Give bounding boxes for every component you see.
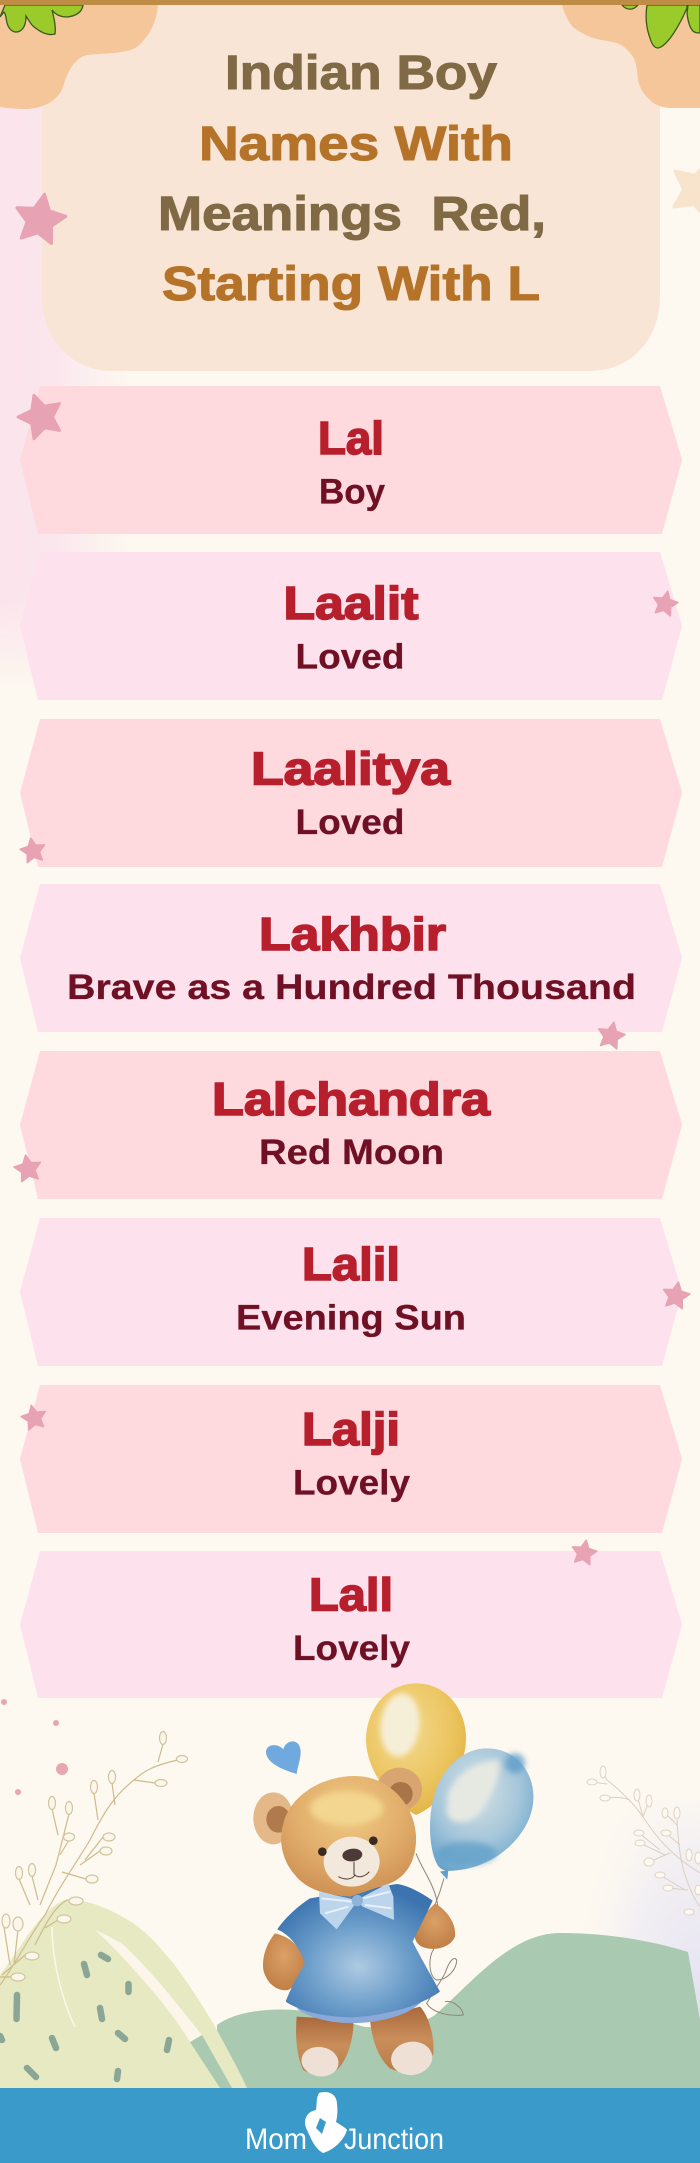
yellow balloon: [366, 1683, 466, 1815]
green hill: [217, 1933, 700, 2088]
meaning: Lovely: [293, 1464, 411, 1502]
top band: [0, 0, 700, 5]
banner: Laalitya: [20, 719, 682, 867]
star: beige: [664, 152, 700, 223]
banner: Lalil: [20, 1218, 682, 1366]
meaning: Evening Sun: [236, 1298, 466, 1338]
name: Lalil: [302, 1238, 400, 1290]
name: Lakhbir: [259, 908, 446, 960]
yellow hill: [0, 1899, 247, 2088]
name: Lall: [309, 1568, 393, 1620]
blue balloon: [430, 1748, 533, 1879]
footer band: [0, 2088, 700, 2163]
title: Meanings Red,: [158, 188, 546, 241]
banner: Lalji: [20, 1385, 682, 1533]
meaning: Loved: [296, 638, 404, 676]
left arm: [263, 1933, 305, 1990]
meaning: Lovely: [293, 1629, 411, 1668]
logo figure: [305, 2092, 347, 2153]
banner: Lalchandra: [20, 1051, 682, 1199]
dots: [1, 1699, 68, 1795]
title: Names With: [199, 118, 513, 171]
meaning: Loved: [296, 803, 404, 842]
meaning: Boy: [319, 472, 386, 512]
name: Laalit: [284, 577, 418, 629]
name: Lal: [318, 412, 384, 464]
eyes: [318, 1836, 378, 1856]
hem lace: [297, 2000, 422, 2023]
left branch: [0, 1732, 188, 1985]
mouth: [338, 1862, 369, 1879]
name: Laalitya: [251, 742, 450, 794]
meaning: Brave as a Hundred Thousand: [67, 968, 636, 1007]
bow tie: [319, 1883, 394, 1929]
right faded branch: [587, 1766, 700, 1915]
title: Starting With L: [162, 258, 540, 311]
right arm: [415, 1903, 455, 1949]
left ear: [253, 1792, 293, 1844]
name: Lalchandra: [212, 1073, 490, 1125]
corner blob: top left: [0, 5, 158, 109]
head: [281, 1776, 416, 1897]
dress: [277, 1884, 440, 2017]
leaf: top right: [622, 5, 700, 48]
legs: [296, 2007, 434, 2079]
balloon strings: [416, 1853, 463, 2015]
green wedge: [190, 2035, 232, 2088]
head highlight: [310, 1792, 383, 1825]
leaf: top left: [0, 5, 83, 35]
logo: MomJunction: Mom: [245, 2123, 307, 2156]
logo: MomJunction: [245, 2092, 444, 2156]
corner blob: top right: [562, 5, 700, 108]
banner: Lall: [20, 1551, 682, 1698]
meaning: Red Moon: [259, 1133, 444, 1172]
muzzle: [324, 1837, 380, 1887]
banner: Laalit: [20, 552, 682, 700]
illustration: teddy bear with balloons: [253, 1683, 533, 2079]
panel: title card: [42, 5, 660, 371]
title: Indian Boy: [225, 47, 497, 100]
dashes: [0, 1955, 169, 2079]
name: Lalji: [302, 1403, 400, 1455]
right ear: [377, 1768, 422, 1811]
banner: Lal: [20, 386, 682, 534]
decorative stars: [12, 190, 692, 1566]
nose: [342, 1848, 363, 1862]
banner: Lakhbir: [20, 884, 682, 1032]
logo: MomJunction: Junction: [344, 2123, 444, 2156]
white stripe: [95, 1930, 202, 2042]
title: [158, 47, 546, 311]
blue heart: [266, 1741, 301, 1774]
